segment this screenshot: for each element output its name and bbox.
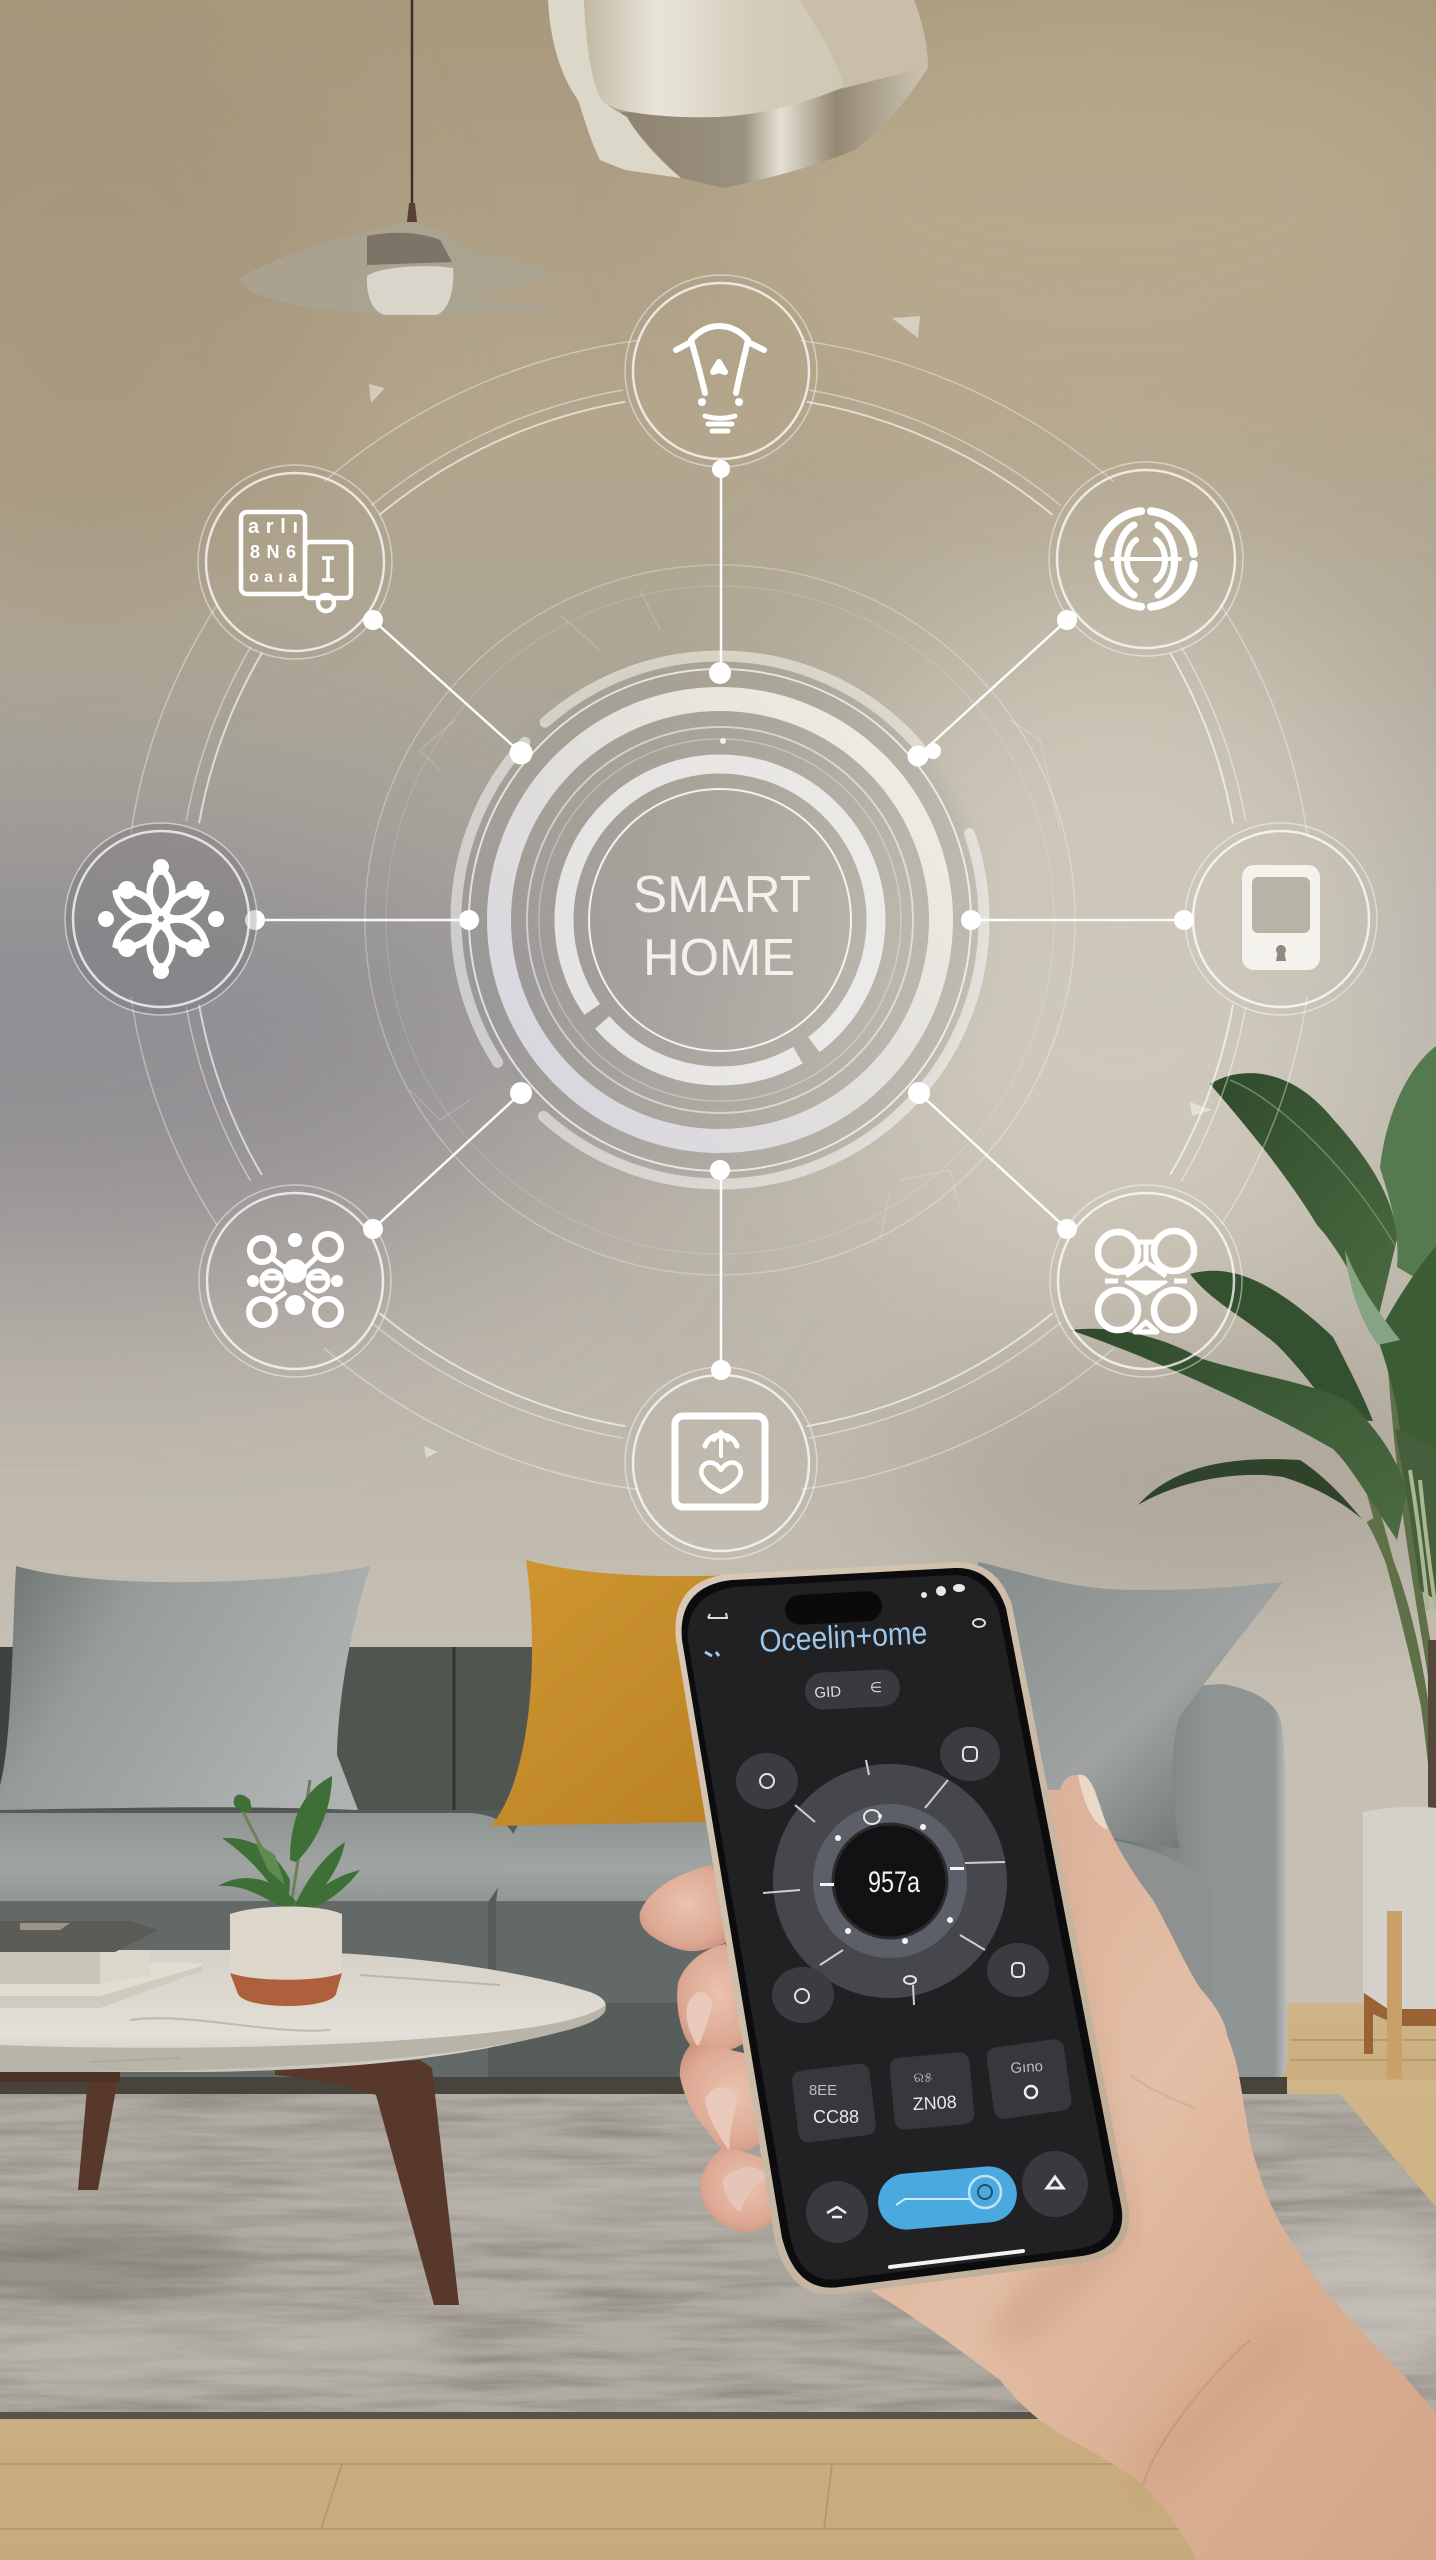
smartphone bbox=[675, 1562, 1129, 2295]
hand holding phone bbox=[640, 1775, 1436, 2560]
icon: light bulb bbox=[676, 326, 764, 431]
icon: control panel bbox=[241, 512, 351, 611]
main front panel bbox=[584, 0, 844, 117]
card one: CC88 bbox=[813, 2107, 859, 2127]
icon: flower network bbox=[98, 859, 224, 979]
card two: ZN08 bbox=[912, 2092, 957, 2114]
icon: swirl sensor bbox=[1098, 511, 1194, 607]
palm shading and creases bbox=[1000, 1830, 1300, 2485]
connector lines with nodes bbox=[245, 460, 1194, 1380]
wood floor bbox=[0, 2003, 1436, 2560]
icon: door lock device bbox=[1242, 865, 1320, 970]
phone bezel bbox=[682, 1568, 1122, 2288]
icon: molecule cluster bbox=[247, 1233, 343, 1325]
icon: control panel: 8N6 bbox=[250, 542, 296, 562]
plant pot on stand bbox=[1363, 1807, 1436, 2079]
floor shadow under sofa bbox=[0, 2077, 1287, 2097]
dial control bbox=[763, 1760, 1007, 2005]
table legs bbox=[0, 2060, 459, 2305]
finger four bbox=[700, 2148, 790, 2232]
hub title text: HOME bbox=[643, 929, 795, 987]
finger one bbox=[640, 1865, 735, 1951]
pendant lamp large bbox=[548, 0, 928, 188]
small potted plant bbox=[218, 1776, 360, 2006]
satellite buttons bbox=[736, 1727, 1049, 2023]
top pill: ∈ bbox=[870, 1679, 882, 1695]
card one: 8EE bbox=[809, 2082, 837, 2099]
icon: control panel: oaıa bbox=[249, 569, 297, 586]
icon: smart socket bbox=[675, 1416, 765, 1507]
rug bbox=[0, 2094, 1436, 2420]
back right panel bbox=[800, 0, 928, 88]
thumbnail bbox=[1078, 1775, 1108, 1830]
top pill: GID bbox=[814, 1683, 842, 1702]
card three: Gıno bbox=[1010, 2058, 1044, 2077]
dynamic island bbox=[784, 1590, 883, 1625]
concentric hub rings bbox=[469, 669, 971, 1171]
outer orbit rings bbox=[125, 335, 1313, 1495]
large potted plant bbox=[1070, 1046, 1436, 2079]
pillow orange bbox=[491, 1560, 820, 1826]
card one bbox=[791, 2063, 877, 2143]
dial control: 957a bbox=[868, 1866, 920, 1899]
card three bbox=[985, 2038, 1073, 2120]
status bar icons bbox=[705, 1584, 985, 1656]
pendant lamp small bbox=[239, 0, 556, 315]
pillow grey left bbox=[0, 1566, 370, 1810]
phone frame bbox=[675, 1562, 1129, 2295]
panel small label text: arlı bbox=[248, 516, 298, 538]
stack of books bbox=[0, 1921, 202, 2008]
satellite rings bbox=[65, 275, 1377, 1559]
coffee table bbox=[0, 1776, 606, 2305]
hub backdrop and faint rings bbox=[365, 565, 1075, 1275]
central smart home hub diagram bbox=[65, 275, 1377, 1559]
small floating triangles bbox=[369, 316, 1212, 1458]
card two bbox=[889, 2052, 975, 2130]
bottom controls bbox=[806, 2151, 1088, 2243]
sofa arm bbox=[1100, 1684, 1287, 2080]
hub title text bbox=[633, 866, 811, 987]
app title: Oceelin+ome bbox=[758, 1614, 928, 1659]
segmented outer arcs bbox=[456, 656, 984, 1184]
card two: ର୫ bbox=[913, 2069, 933, 2085]
icon: linked rings bbox=[1098, 1231, 1194, 1332]
sofa bbox=[0, 1560, 1287, 2080]
inner lower band bbox=[621, 67, 928, 188]
left ribbon bbox=[548, 0, 681, 178]
status cards bbox=[791, 2038, 1073, 2143]
pillow grey right bbox=[960, 1562, 1283, 1849]
hub title text: SMART bbox=[633, 866, 811, 924]
home indicator bbox=[890, 2251, 1023, 2267]
finger two bbox=[677, 1944, 760, 2055]
seat cushions bbox=[0, 1813, 1213, 2077]
phone screen bbox=[688, 1575, 1113, 2280]
table top bbox=[0, 1950, 606, 2072]
palm and thumb bbox=[870, 1775, 1436, 2560]
top pill bbox=[804, 1669, 901, 1710]
finger three bbox=[680, 2045, 790, 2153]
